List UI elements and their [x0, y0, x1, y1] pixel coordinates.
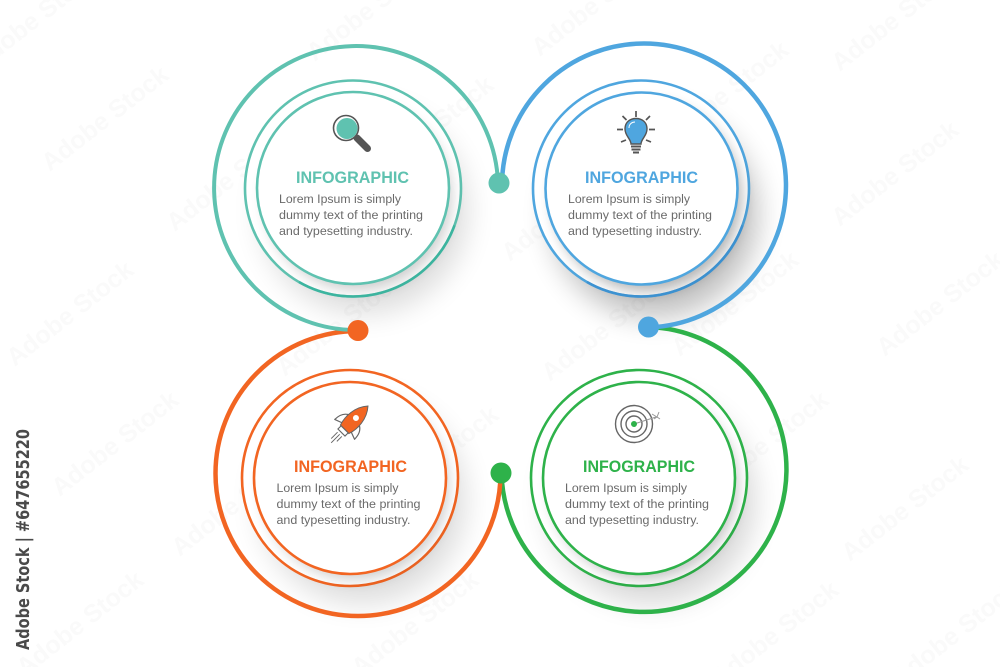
teal body text: Lorem Ipsum is simply — [279, 192, 402, 206]
stock watermark pattern: Adobe Stock — [36, 61, 174, 177]
dot: blue — [638, 316, 659, 338]
stock watermark pattern: Adobe Stock — [496, 151, 634, 267]
green inner disc — [543, 382, 735, 574]
panel: orange step — [242, 370, 466, 604]
orange inner disc — [254, 382, 446, 574]
stock watermark pattern: Adobe Stock — [166, 446, 304, 562]
teal body text: and typesetting industry. — [279, 224, 413, 238]
orange body text: Lorem Ipsum is simply — [276, 481, 399, 495]
blue body text: and typesetting industry. — [568, 224, 702, 238]
arc: orange outer spiral — [216, 331, 501, 616]
stock watermark pattern: Adobe Stock — [826, 116, 964, 232]
connector dots — [348, 172, 659, 484]
blue body text: Lorem Ipsum is simply — [568, 192, 691, 206]
stock watermark pattern: Adobe Stock — [656, 36, 794, 152]
arc: blue outer spiral — [502, 43, 786, 327]
blue heading: INFOGRAPHIC — [585, 169, 698, 187]
green heading: INFOGRAPHIC — [583, 458, 695, 476]
rocket body — [339, 401, 373, 435]
stock watermark pattern: Adobe Stock — [361, 71, 499, 187]
teal inner disc — [257, 92, 449, 284]
orange heading: INFOGRAPHIC — [294, 458, 407, 476]
green ring shadow — [547, 396, 755, 604]
teal outer ring — [245, 80, 461, 296]
orange body text — [276, 481, 420, 527]
green disc shadow — [551, 393, 737, 579]
arc: green outer spiral — [502, 327, 786, 612]
rocket fins — [335, 410, 364, 439]
blue body text: dummy text of the printing — [568, 208, 712, 222]
dot: green — [490, 462, 512, 484]
green body text: dummy text of the printing — [565, 497, 709, 511]
icon: rocket — [321, 396, 378, 453]
teal body text — [279, 192, 423, 238]
orange ring shadow — [258, 396, 466, 604]
rocket window — [352, 414, 360, 422]
orange body text: dummy text of the printing — [276, 497, 420, 511]
panel: green step — [531, 370, 755, 604]
orange disc shadow — [262, 393, 448, 579]
blue inner disc — [546, 92, 738, 284]
stock watermark pattern: Adobe Stock — [366, 401, 504, 517]
green outer ring — [531, 370, 747, 586]
green body text: Lorem Ipsum is simply — [565, 481, 688, 495]
stock watermark pattern: Adobe Stock — [536, 271, 674, 387]
blue ring shadow — [550, 110, 758, 318]
green body text — [565, 481, 709, 527]
stock id label: Adobe Stock | #647655220 — [14, 429, 34, 650]
arc: teal outer spiral — [214, 46, 498, 330]
dot: orange — [348, 320, 368, 341]
stock watermark pattern: Adobe Stock — [696, 386, 834, 502]
dot: teal — [488, 172, 510, 194]
stock watermark pattern: Adobe Stock — [666, 246, 804, 362]
panel: teal step — [245, 80, 468, 314]
blue body text — [568, 192, 712, 238]
green body text: and typesetting industry. — [565, 513, 699, 527]
stock watermark pattern: Adobe Stock — [836, 451, 974, 567]
teal ring shadow — [260, 106, 468, 314]
stock watermark pattern: Adobe Stock — [1, 256, 139, 372]
blue outer ring — [533, 80, 749, 296]
blue disc shadow — [553, 103, 741, 291]
teal heading: INFOGRAPHIC — [296, 169, 409, 187]
rocket nozzle — [338, 426, 348, 436]
icon: light bulb — [617, 111, 655, 152]
stock watermark pattern: Adobe Stock — [161, 121, 299, 237]
stock watermark pattern: Adobe Stock — [46, 386, 184, 502]
icon: magnifier — [334, 116, 368, 148]
teal body text: dummy text of the printing — [279, 208, 423, 222]
orange outer ring — [242, 370, 458, 586]
stock watermark pattern: Adobe Stock — [271, 266, 409, 382]
rocket exhaust — [329, 432, 342, 445]
panel: blue step — [533, 80, 758, 318]
orange body text: and typesetting industry. — [276, 513, 410, 527]
icon: target — [616, 406, 660, 442]
teal disc shadow — [265, 104, 451, 290]
